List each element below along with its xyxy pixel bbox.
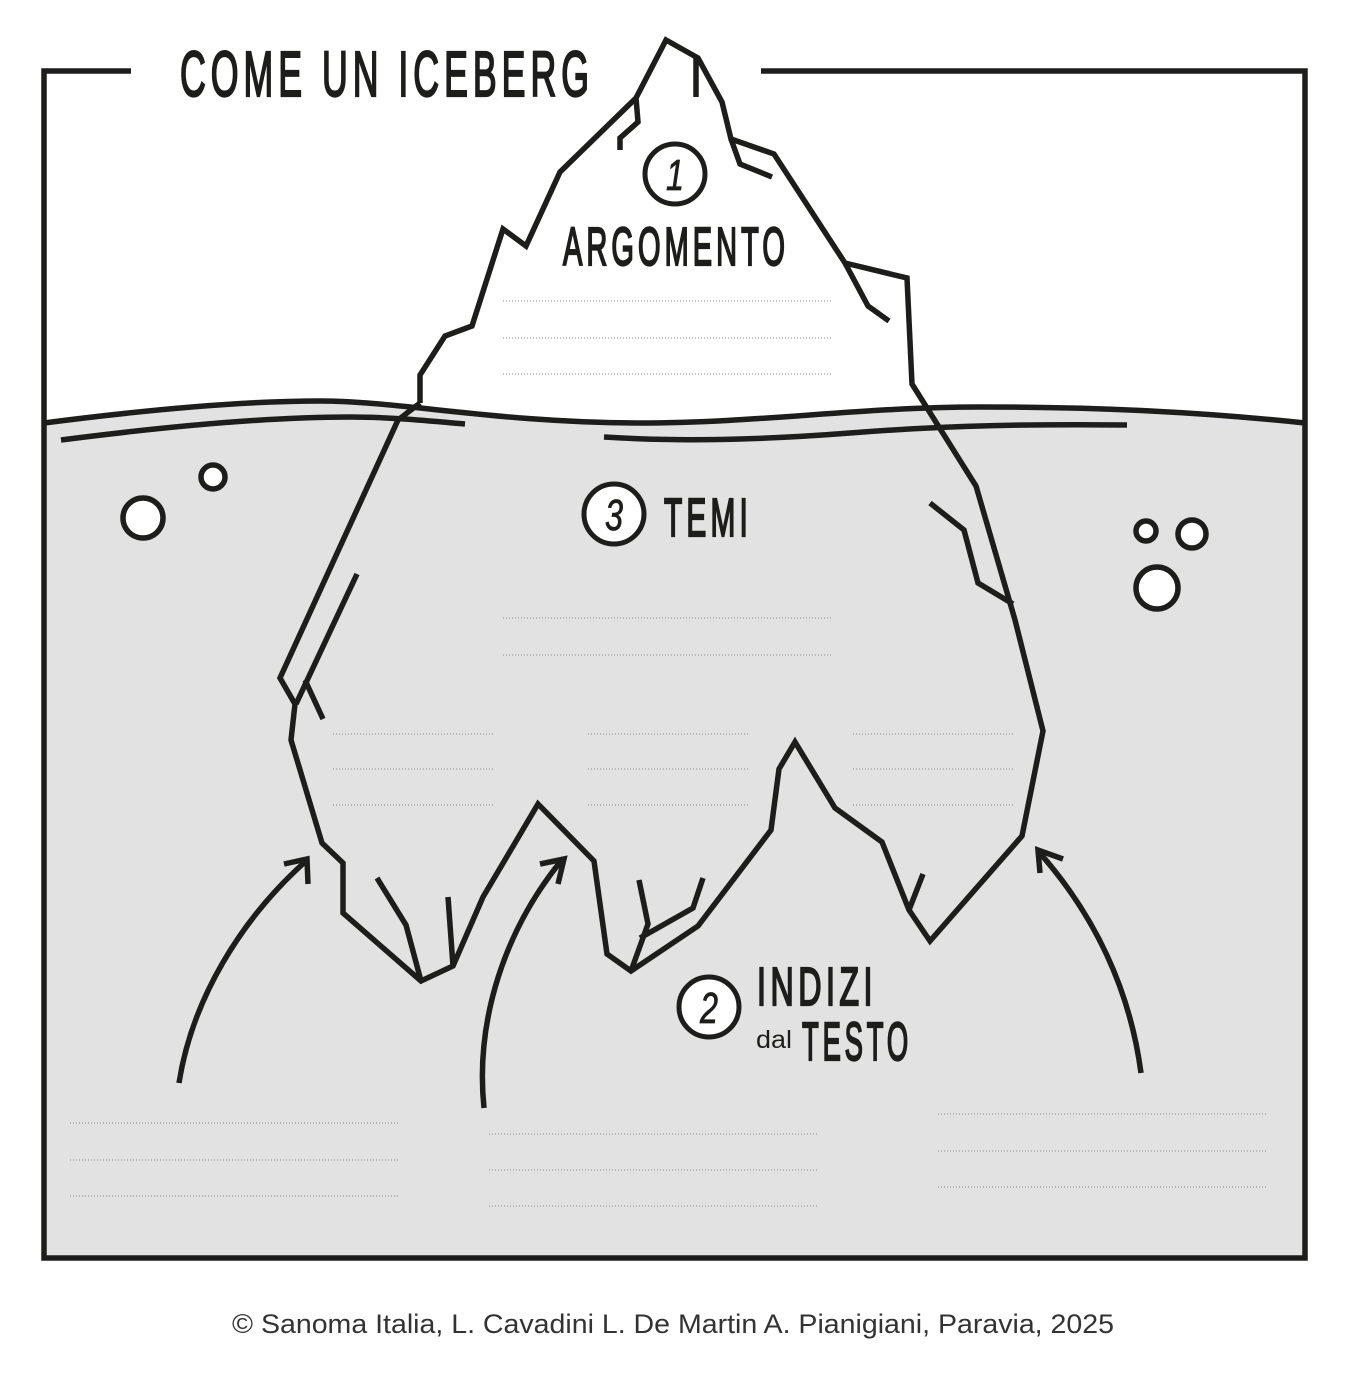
dal text: dal: [756, 1026, 792, 1054]
label: argomento: [563, 144, 789, 277]
writing lines: temi center: [503, 618, 832, 655]
water area: [44, 401, 1305, 1258]
indizi text: INDIZI: [757, 957, 877, 1017]
writing lines: argomento: [503, 301, 832, 374]
arrow right: [1038, 850, 1141, 1073]
writing lines: clue middle: [489, 1134, 818, 1206]
iceberg: [280, 40, 1043, 981]
waterline: [44, 401, 1305, 423]
bubbles right: [1136, 520, 1206, 609]
number 3 badge: 3: [605, 491, 623, 540]
argomento text: ARGOMENTO: [563, 217, 789, 277]
number 1 badge: [645, 144, 705, 204]
writing lines: temi middle: [588, 734, 748, 805]
bubbles left: [123, 465, 225, 538]
testo text: TESTO: [802, 1012, 912, 1072]
iceberg outline: [280, 40, 1043, 981]
number 2 badge: [679, 977, 739, 1037]
writing lines: clue left: [70, 1123, 399, 1196]
number 2 badge: 2: [699, 984, 718, 1033]
number 1 badge: 1: [666, 151, 684, 200]
label: indizi dal testo: [679, 957, 912, 1072]
title: COME UN ICEBERG: [180, 38, 594, 110]
lower wave left: [61, 417, 465, 440]
cracks: [296, 58, 1013, 981]
writing lines: temi left: [333, 734, 493, 805]
lower wave right: [604, 425, 1127, 440]
copyright: © Sanoma Italia, L. Cavadini L. De Martin A. Pianigiani, Paravia, 2025: [232, 1309, 1114, 1339]
arrow left: [179, 859, 308, 1083]
writing lines: clue right: [938, 1114, 1267, 1187]
writing lines: temi right: [853, 734, 1013, 805]
arrow middle: [482, 859, 564, 1108]
temi text: TEMI: [664, 488, 752, 548]
label: temi: [584, 484, 752, 548]
number 3 badge: [584, 484, 644, 544]
